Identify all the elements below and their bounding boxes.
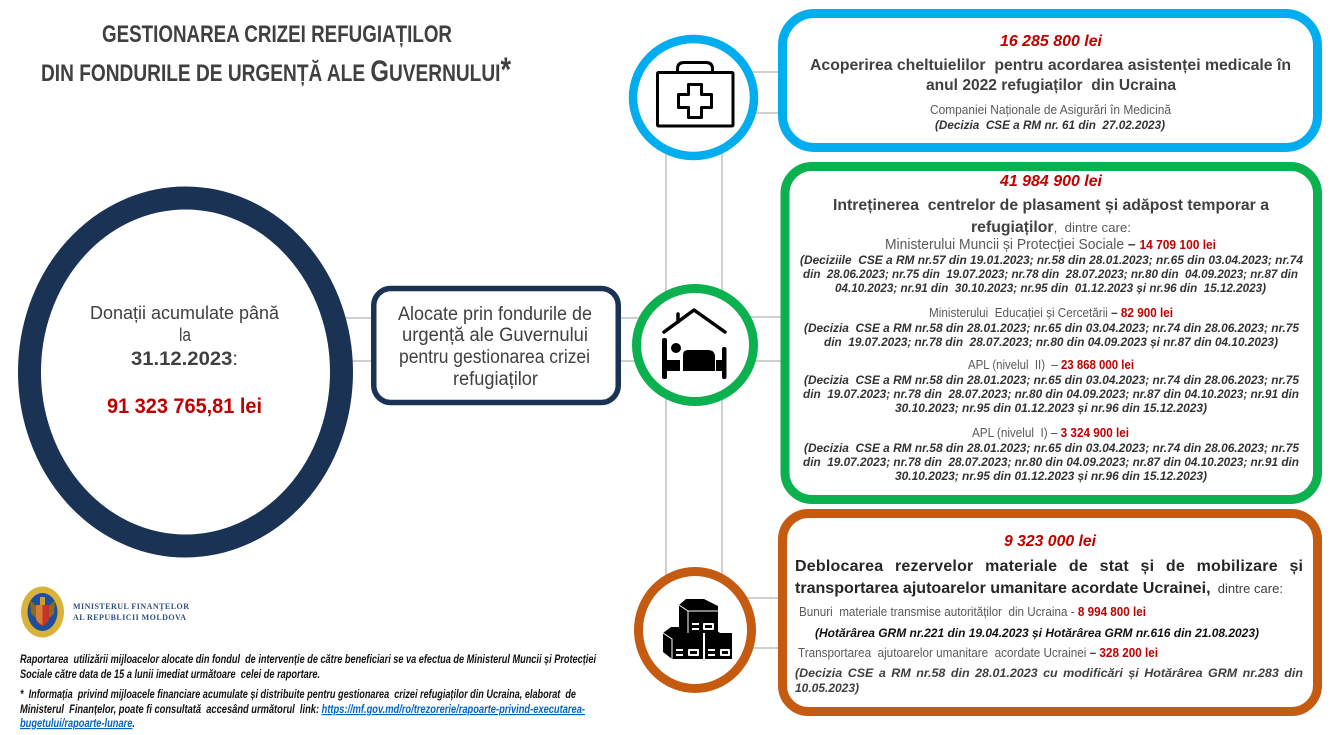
footnote: reporting note: Raportarea utilizării mijloacelor alocate din fondul de intervenție de către beneficiari se va efectua de Ministerul Muncii și Protecției — [20, 654, 597, 666]
icon: house with bed — [636, 288, 754, 402]
panel: shelter centres: 30.10.2023; nr.95 din 01.12.2023 și nr.96 din 15.12.2023) — [895, 401, 1207, 415]
panel: allocated emergency funds: pentru gestionarea crizei — [399, 347, 590, 368]
panel: state reserves and transport: Bunuri materiale transmise autorităților din Ucraina - 8 994 800 lei — [799, 605, 1146, 619]
footnote: information source link: bugetului/rapoarte-lunare. — [20, 718, 135, 730]
panel: shelter centres: Ministerului Educației și Cercetării – 82 900 lei — [929, 306, 1173, 320]
footnote: reporting note — [20, 654, 597, 681]
panel: state reserves and transport — [782, 514, 1318, 712]
panel: medical assistance: 16 285 800 lei — [1000, 33, 1103, 50]
panel: shelter centres: din 19.07.2023; nr.78 din 28.07.2023; nr.80 din 04.09.2023 și nr.87 din 04.10.2023) — [824, 335, 1278, 349]
panel: shelter centres: din 19.07.2023; nr.78 din 28.07.2023; nr.80 din 04.09.2023; nr.87 din 04.10.2023; nr.91 din — [803, 455, 1299, 469]
panel: shelter centres: (Decizia CSE a RM nr.58 din 28.01.2023; nr.65 din 03.04.2023; nr.74 din 28.06.2023; nr.75 — [804, 441, 1299, 455]
panel: shelter centres: 04.10.2023; nr.91 din 30.10.2023; nr.95 din 01.12.2023 și nr.96 din 15.12.2023) — [835, 281, 1266, 295]
logo: Ministry of Finance — [21, 586, 189, 638]
panel: medical assistance — [782, 14, 1318, 148]
panel: shelter centres: APL (nivelul II) – 23 868 000 lei — [968, 358, 1134, 372]
panel: medical assistance: Acoperirea cheltuielilor pentru acordarea asistenței medicale în — [810, 57, 1291, 74]
panel: total donations circle: 91 323 765,81 lei — [107, 395, 262, 418]
logo: Ministry of Finance: AL REPUBLICII MOLDOVA — [73, 613, 186, 622]
panel: shelter centres: din 28.06.2023; nr.75 din 19.07.2023; nr.78 din 28.07.2023; nr.80 din 04.09.2023; nr.87 din — [803, 267, 1298, 281]
panel: total donations circle: 31.12.2023: — [131, 348, 238, 370]
panel: total donations circle — [30, 198, 342, 546]
icon: first aid kit — [633, 39, 754, 156]
title — [41, 21, 512, 89]
panel: allocated emergency funds — [374, 288, 618, 402]
panel: state reserves and transport: (Decizia CSE a RM nr.58 din 28.01.2023 cu modificări și Hotărârea GRM nr.283 din — [795, 666, 1303, 680]
panel: shelter centres: 41 984 900 lei — [999, 173, 1103, 190]
panel: state reserves and transport: (Hotărârea GRM nr.221 din 19.04.2023 și Hotărârea GRM nr.616 din 21.08.2023) — [815, 626, 1259, 640]
footnote: information source link: Ministerul Finanțelor, poate fi consultată accesând următorul link: https://mf.gov.md/ro/trezorerie/rapoarte-privind-executarea- — [20, 704, 585, 716]
panel: shelter centres — [785, 166, 1318, 500]
panel: state reserves and transport: 9 323 000 lei — [1004, 533, 1097, 550]
footnote: information source link: * Informația privind mijloacele financiare acumulate și distribuite pentru gestionarea crizei refugiaților din Ucraina, elaborat de — [20, 689, 576, 701]
panel: state reserves and transport: transportarea ajutoarelor umanitare acordate Ucrainei, dintre care: — [795, 580, 1283, 597]
footnote: reporting note: Sociale către data de 15 a lunii imediat următoare celei de raportare. — [20, 669, 320, 681]
panel: allocated emergency funds: refugiaților — [453, 369, 539, 390]
panel: state reserves and transport: 10.05.2023) — [795, 681, 859, 695]
panel: shelter centres: (Deciziile CSE a RM nr.57 din 19.01.2023; nr.58 din 28.01.2023; nr.65 din 03.04.2023; nr.74 — [800, 253, 1303, 267]
panel: medical assistance: (Decizia CSE a RM nr. 61 din 27.02.2023) — [935, 118, 1165, 132]
panel: medical assistance: Companiei Naționale de Asigurări în Medicină — [930, 102, 1172, 117]
panel: state reserves and transport: Transportarea ajutoarelor umanitare acordate Ucrainei – 328 200 lei — [798, 646, 1158, 660]
panel: allocated emergency funds: urgență ale Guvernului — [402, 325, 588, 346]
panel: shelter centres: (Decizia CSE a RM nr.58 din 28.01.2023; nr.65 din 03.04.2023; nr.74 din 28.06.2023; nr.75 — [804, 321, 1299, 335]
panel: shelter centres: 30.10.2023; nr.95 din 01.12.2023 și nr.96 din 15.12.2023) — [895, 469, 1207, 483]
panel: shelter centres: Intreținerea centrelor de plasament și adăpost temporar a — [833, 197, 1269, 214]
icon: coat of arms — [21, 586, 64, 638]
panel: shelter centres: (Decizia CSE a RM nr.58 din 28.01.2023; nr.65 din 03.04.2023; nr.74 din 28.06.2023; nr.75 — [804, 373, 1299, 387]
title: GESTIONAREA CRIZEI REFUGIAȚILOR — [102, 21, 452, 48]
panel: total donations circle: Donații acumulate până — [90, 302, 280, 323]
panel: state reserves and transport: Deblocarea rezervelor materiale de stat și de mobilizare și — [795, 558, 1303, 575]
logo: Ministry of Finance: MINISTERUL FINANȚELOR — [73, 602, 189, 612]
panel: allocated emergency funds: Alocate prin fondurile de — [398, 304, 592, 325]
panel: shelter centres: APL (nivelul I) – 3 324 900 lei — [972, 426, 1129, 440]
panel: total donations circle: la — [179, 324, 192, 345]
title: DIN FONDURILE DE URGENȚĂ ALE GUVERNULUI* — [41, 51, 512, 89]
panel: shelter centres: Ministerului Muncii și Protecției Sociale – 14 709 100 lei — [885, 237, 1216, 253]
panel: shelter centres: refugiaților, dintre care: — [971, 219, 1131, 236]
icon: stacked boxes — [638, 572, 752, 688]
panel: medical assistance: anul 2022 refugiaților din Ucraina — [926, 77, 1176, 94]
footnote: information source link — [20, 689, 585, 730]
panel: shelter centres: din 19.07.2023; nr.78 din 28.07.2023; nr.80 din 04.09.2023; nr.87 din 04.10.2023; nr.91 din — [803, 387, 1299, 401]
